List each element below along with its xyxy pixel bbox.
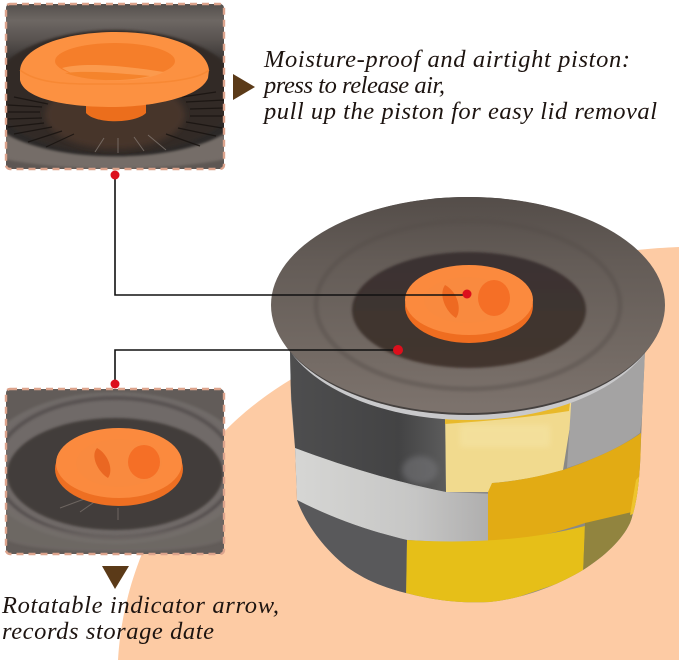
steel rim [276,200,660,420]
marker dots [110,170,472,388]
panel: indicator arrow close-up [0,389,250,554]
text: piston description: pull up the piston for easy lid removal [262,98,657,125]
knob stem [86,104,146,121]
piston knob [405,265,533,343]
text: piston description [262,46,657,125]
knob recess [55,43,175,72]
peach background shape [118,247,679,660]
panel: piston close-up [0,4,240,175]
storage canister [271,197,665,610]
connector lines [115,176,467,384]
arrow: down [102,566,129,589]
scale ticks [8,92,224,147]
arrow: right [233,74,255,100]
text: piston description: Moisture-proof and airtight piston: [263,46,630,73]
knob disc [20,32,209,107]
lid [271,197,665,413]
knob [55,462,183,506]
line: bottom panel to indicator [115,350,398,384]
paint texture [402,456,438,484]
text: piston description: press to release air, [262,72,445,99]
indicator ticks [60,499,118,520]
canister body [285,345,650,610]
text: indicator description [1,592,279,645]
text: indicator description: Rotatable indicator arrow, [1,592,279,619]
text: indicator description: records storage date [2,618,214,645]
line: top panel to piston [115,176,467,295]
